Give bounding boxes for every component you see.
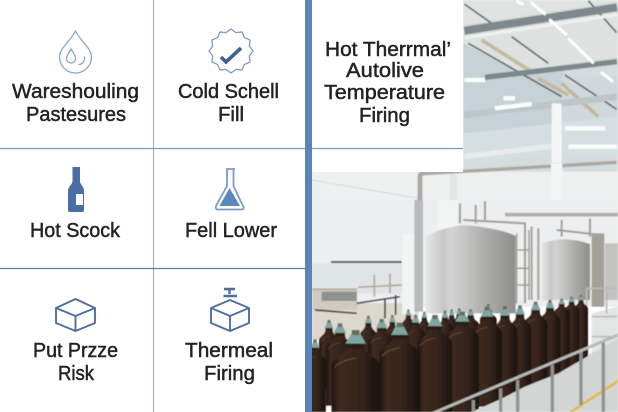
railing <box>432 333 618 412</box>
label: Wareshouling Pastesures: Pastesures <box>26 104 126 126</box>
label: Thermeal Firing: Thermeal <box>185 340 273 362</box>
large steel tank <box>426 225 516 313</box>
cell: Hot Scock <box>30 167 121 242</box>
label: Thermeal Firing: Firing <box>204 363 255 385</box>
icon: flask <box>216 169 244 210</box>
tanks, bottles and railing <box>304 200 618 412</box>
yellow floor line <box>568 379 618 412</box>
panel: left grid background <box>0 0 305 412</box>
label: Cold Schell Fill: Fill <box>218 104 244 126</box>
cell: Fell Lower <box>185 169 277 242</box>
cell: Thermeal Firing <box>185 289 273 385</box>
label: Hot Thermal Autolive Temperature Firing: Hot Therrmal’ <box>325 39 451 61</box>
icon: box <box>56 299 95 331</box>
icon: box with tap <box>211 289 249 331</box>
label: Hot Thermal Autolive Temperature Firing <box>324 39 451 127</box>
small white tank <box>402 262 416 314</box>
label: Cold Schell Fill <box>178 81 279 126</box>
ceiling and beams <box>312 0 618 200</box>
label: Fell Lower: Fell Lower <box>185 220 277 242</box>
label: Put Przze Risk: Put Przze <box>33 340 118 362</box>
cell: Cold Schell Fill <box>178 29 279 126</box>
photo: bottling plant interior <box>304 0 618 412</box>
panel: white text card <box>312 0 463 172</box>
icon: bottle <box>68 167 84 212</box>
floor at right <box>478 352 594 408</box>
pipe column <box>414 200 423 312</box>
machine at left wall <box>312 273 402 318</box>
floor in front <box>472 338 618 412</box>
blue vertical band <box>305 0 312 412</box>
label: Put Przze Risk: Risk <box>58 363 95 385</box>
third steel tank <box>605 243 618 300</box>
label: Hot Thermal Autolive Temperature Firing: Firing <box>359 105 410 127</box>
cell: Put Przze Risk <box>33 299 118 385</box>
label: Hot Thermal Autolive Temperature Firing: Autolive <box>346 60 424 82</box>
icon: gear with check mark <box>209 29 253 73</box>
ladder <box>517 230 529 303</box>
label: Cold Schell Fill: Cold Schell <box>178 81 279 103</box>
label: Put Przze Risk <box>33 340 118 385</box>
second steel tank <box>542 239 590 300</box>
label: Wareshouling Pastesures <box>12 81 139 126</box>
label: Hot Scock: Hot Scock <box>30 220 121 242</box>
front row of bottles <box>331 300 560 412</box>
cell: Wareshouling Pastesures <box>12 31 139 126</box>
label: Wareshouling Pastesures: Wareshouling <box>12 81 139 103</box>
label: Thermeal Firing <box>185 340 273 385</box>
back row of bottles <box>304 295 588 412</box>
label: Hot Thermal Autolive Temperature Firing: Temperature <box>324 82 445 104</box>
icon: water drop <box>60 31 92 73</box>
